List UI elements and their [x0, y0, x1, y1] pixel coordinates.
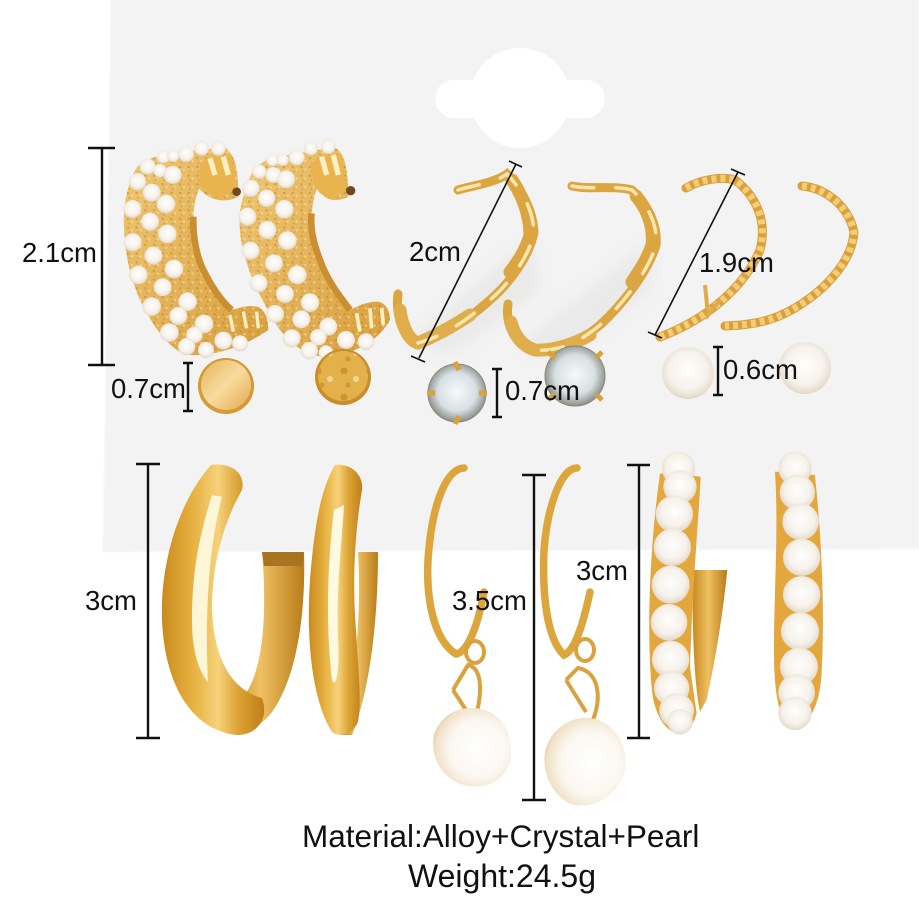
measure: 3.5cm pearl drop: 3.5cm: [452, 585, 527, 616]
earring: twisted hoop 1: [397, 174, 534, 343]
text: material: Material:Alloy+Crystal+Pearl: [302, 818, 699, 854]
earring: chunky gold hoop left: [162, 465, 304, 735]
measure: 3.5cm pearl drop: [452, 475, 546, 800]
pearls: [651, 452, 697, 734]
measure: 3cm chunky hoop: 3cm: [85, 585, 137, 616]
earring: twisted hoop 2: [507, 186, 656, 350]
earring: pearl studded C hoop right: [238, 139, 390, 360]
earring: thin hoop with baroque pearl right: [544, 468, 625, 805]
measure: 1.9cm diagonal: [648, 169, 774, 338]
earring: rope hoop 3: [660, 178, 762, 337]
measure: 0.6cm pearl: [713, 347, 798, 395]
earring: pearl stud left: [662, 347, 714, 399]
measure: 0.7cm gold stud: 0.7cm: [111, 373, 186, 404]
earring: pearl studded C hoop left: [123, 141, 268, 358]
text: weight: Weight:24.5g: [408, 858, 596, 894]
earring: chunky gold hoop right: [309, 465, 378, 735]
measure: 3cm pearl hoop: [576, 465, 650, 738]
pearls: [238, 139, 374, 360]
earring: pearl stud right: [779, 342, 831, 394]
pearls: [778, 452, 820, 730]
earring: crystal stud left: [427, 362, 487, 424]
measure: 0.6cm pearl: 0.6cm: [723, 354, 798, 385]
shadows under top earrings: [410, 240, 650, 360]
measure: 2.1cm bracket: [22, 148, 115, 365]
measure: 2.1cm bracket: 2.1cm: [22, 237, 97, 268]
earring: gold stud flat left: [198, 358, 254, 414]
icon: hanging hole: [435, 48, 605, 148]
measure: 3cm chunky hoop: [85, 464, 160, 738]
earring: crystal stud right: [545, 346, 605, 406]
measure: 0.7cm gold stud: [111, 363, 193, 411]
earring: gold stud textured right: [315, 349, 371, 405]
measure: 0.7cm crystal: [492, 369, 580, 417]
pearls: [123, 141, 248, 358]
measure: 3cm pearl hoop: 3cm: [576, 555, 628, 586]
measure: 0.7cm crystal: 0.7cm: [505, 375, 580, 406]
measure: 2cm diagonal: [409, 161, 522, 362]
panel: backing card: [103, 0, 919, 552]
earring: pearl hoop left: [649, 452, 727, 734]
measure: 1.9cm diagonal: 1.9cm: [699, 247, 774, 278]
earring: rope hoop 4: [725, 186, 854, 326]
earring: thin hoop with baroque pearl left: [428, 468, 511, 786]
earring: pearl hoop right: [774, 452, 823, 730]
measure: 2cm diagonal: 2cm: [409, 236, 461, 267]
